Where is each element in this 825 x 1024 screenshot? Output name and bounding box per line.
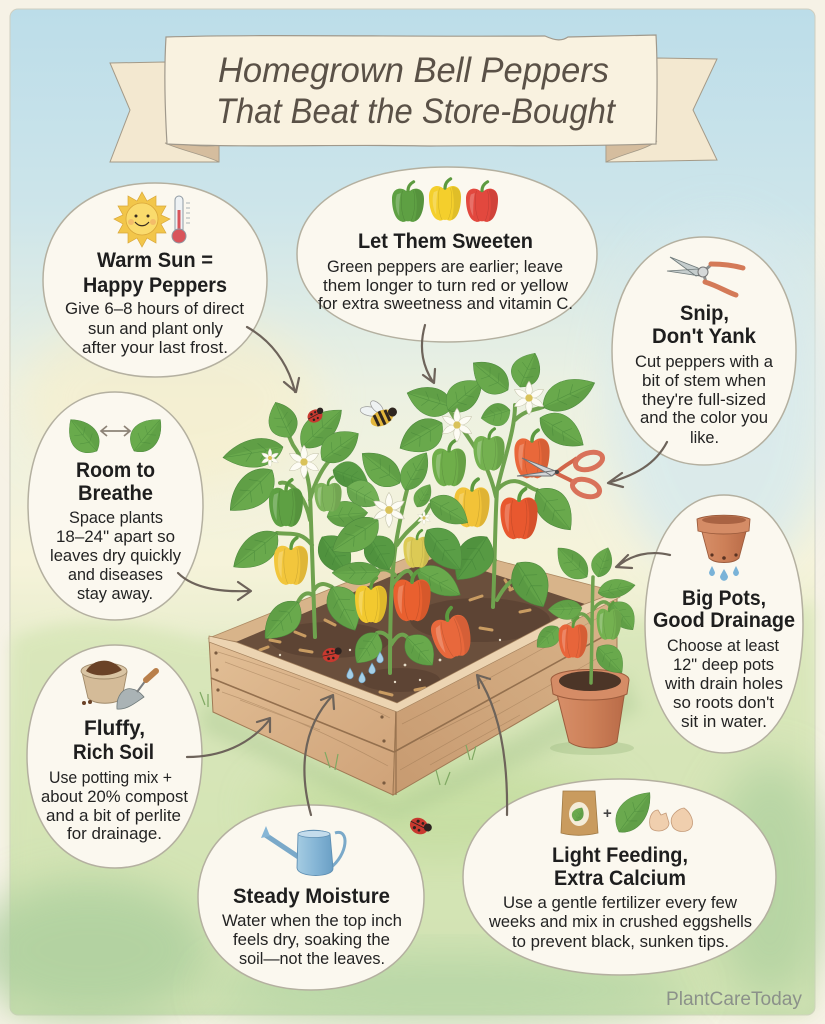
arrow: snip to scissors	[608, 442, 667, 487]
body text: Water when the top inch	[222, 911, 402, 930]
body text	[488, 893, 752, 951]
flowers	[288, 445, 320, 479]
icon: water drops on soil	[347, 652, 383, 683]
leaves	[393, 347, 600, 615]
body text	[318, 257, 573, 313]
callout: steady moisture	[198, 805, 424, 990]
arrow: feeding to bed	[477, 675, 507, 815]
callout: big pots good drainage: Good Drainage	[653, 609, 795, 632]
callout: snip don't yank	[612, 237, 796, 465]
callout: let them sweeten	[297, 167, 597, 342]
arrow: sun to plant	[247, 327, 299, 392]
body text: for drainage.	[67, 824, 162, 843]
mulch chips	[260, 580, 540, 695]
body text: for extra sweetness and vitamin C.	[318, 294, 573, 313]
callout: warm sun	[43, 183, 267, 377]
body text: sit in water.	[681, 712, 767, 731]
title text: Homegrown Bell Peppers	[218, 51, 609, 90]
body text: and a bit of perlite	[46, 806, 181, 825]
heading: Light Feeding,	[552, 844, 688, 867]
body text: with drain holes	[664, 674, 783, 693]
stems	[370, 490, 430, 673]
heading: Snip,	[680, 302, 729, 325]
body text: bit of stem when	[642, 371, 766, 390]
heading: Big Pots,	[682, 587, 766, 610]
terracotta pot	[550, 670, 634, 755]
left wooden face	[209, 638, 396, 795]
icon: soil pot	[81, 661, 127, 705]
callout: light feeding: Extra Calcium	[554, 867, 686, 890]
icon: pot with drain holes	[697, 515, 750, 581]
body text: them longer to turn red or yellow	[323, 276, 569, 295]
heading: Fluffy,	[84, 717, 145, 740]
body text: feels dry, soaking the	[233, 930, 390, 949]
icon: ladybug on grass	[407, 814, 434, 839]
leaves	[220, 397, 386, 649]
icon: eggshells	[650, 808, 693, 832]
body text: Cut peppers with a	[635, 352, 774, 371]
arrow: big pots to potted plant	[616, 553, 670, 568]
body text: soil—not the leaves.	[239, 949, 385, 968]
body text	[41, 768, 188, 843]
icon: pruning shears	[667, 257, 743, 295]
flowers	[372, 492, 406, 528]
heading: Steady Moisture	[233, 885, 390, 908]
body text: Choose at least	[667, 636, 779, 655]
banner panel	[165, 35, 657, 146]
banner tails	[110, 58, 717, 162]
icon: scissors cutting pepper	[517, 449, 605, 500]
arrow: room to plants	[178, 573, 251, 600]
body text: leaves dry quickly	[50, 546, 181, 565]
leaves	[325, 443, 475, 673]
grass tufts	[200, 692, 476, 785]
body text: Green peppers are earlier; leave	[327, 257, 563, 276]
heading: Room to	[76, 459, 155, 482]
body text: 18–24" apart so	[56, 527, 175, 546]
title text: That Beat the Store-Bought	[216, 92, 616, 131]
bed rim and plank lines	[211, 610, 617, 795]
peppers	[314, 477, 342, 512]
callout: light feeding	[463, 779, 776, 975]
body text: Use potting mix +	[49, 768, 172, 787]
body text: weeks and mix in crushed eggshells	[488, 912, 752, 931]
pepper plant: middle	[325, 443, 476, 673]
body text	[635, 352, 774, 447]
raised wooden garden bed	[200, 545, 640, 820]
body text: stay away.	[77, 584, 153, 603]
body text: after your last frost.	[82, 338, 228, 357]
title banner	[110, 35, 717, 162]
title text	[216, 51, 616, 131]
callout: fluffy rich soil: Rich Soil	[73, 741, 154, 764]
pepper plant: right	[393, 347, 600, 615]
arrow: soil to bed	[187, 718, 270, 757]
body text: Give 6–8 hours of direct	[65, 299, 244, 318]
icon: thermometer	[172, 196, 190, 243]
soil	[236, 556, 585, 704]
body text: to prevent black, sunken tips.	[512, 932, 729, 951]
icon: smiling sun	[114, 192, 170, 247]
callout: snip don't yank: Don't Yank	[652, 325, 756, 348]
icon: two leaves with arrow	[59, 410, 170, 460]
body text	[50, 508, 181, 603]
callout: room to breathe: Breathe	[78, 482, 153, 505]
icon: trowel	[117, 671, 156, 709]
icon: fertilizer bag	[561, 791, 598, 835]
icon: ladybug on leaf	[305, 406, 327, 425]
icon: watering can	[261, 826, 345, 876]
body text: Space plants	[69, 508, 163, 527]
body text: and diseases	[68, 565, 163, 584]
body text: about 20% compost	[41, 787, 188, 806]
body text: sun and plant only	[88, 319, 223, 338]
icon: three peppers	[392, 179, 498, 222]
icon: leaf	[607, 784, 659, 839]
bed shadow	[200, 675, 640, 820]
body text: 12" deep pots	[673, 655, 774, 674]
callout: warm sun: Happy Peppers	[83, 274, 227, 297]
body text: like.	[690, 428, 719, 447]
body text: they're full-sized	[642, 390, 766, 409]
callout: room to breathe	[28, 392, 203, 620]
heading: Let Them Sweeten	[358, 230, 533, 253]
stems	[277, 420, 332, 637]
body text	[664, 636, 783, 731]
watermark: PlantCareToday	[666, 989, 802, 1010]
peppers	[403, 530, 431, 568]
callout: fluffy rich soil	[27, 645, 202, 868]
plus sign: +	[603, 805, 612, 822]
body text	[222, 911, 402, 968]
peppers	[432, 441, 466, 486]
heading: Warm Sun =	[97, 249, 213, 272]
body text: Use a gentle fertilizer every few	[503, 893, 738, 912]
callout: big pots good drainage	[645, 495, 803, 753]
body text	[65, 299, 244, 357]
right wooden face	[393, 592, 617, 795]
arrow: sweeten to plant	[422, 325, 435, 383]
icon: ladybug on soil	[322, 646, 343, 663]
body text: so roots don't	[673, 693, 774, 712]
flowers	[441, 408, 473, 442]
icon: bee	[356, 392, 400, 433]
stems	[450, 405, 545, 607]
body text: and the color you	[640, 408, 768, 427]
back inner wall	[209, 545, 617, 642]
pepper plant: left	[220, 397, 386, 649]
arrow: moisture to bed	[304, 695, 334, 815]
pepper plant: potted	[531, 540, 643, 683]
